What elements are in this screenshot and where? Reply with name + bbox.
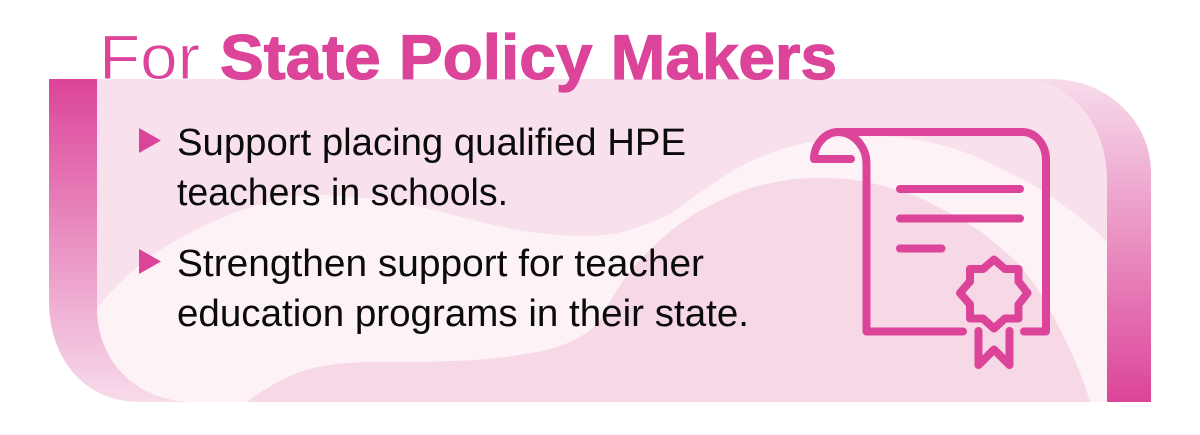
panel: background card	[49, 79, 1151, 402]
title: bold part: State Policy Makers	[220, 23, 837, 93]
bullet list	[139, 122, 749, 335]
bullet text 2: Strengthen support for teacher	[177, 243, 704, 285]
bullet arrow 2	[139, 249, 161, 274]
infographic	[49, 32, 1151, 402]
title	[99, 23, 837, 93]
badge	[960, 260, 1028, 328]
icon: certificate scroll with badge	[814, 132, 1046, 365]
title: light part: For	[99, 23, 200, 93]
bullet text 2: education programs in their state.	[177, 293, 749, 335]
light wave	[97, 136, 1107, 402]
panel face	[97, 79, 1107, 402]
bullet text 1: Support placing qualified HPE	[177, 122, 686, 164]
bullet text 1: teachers in schools.	[177, 172, 508, 214]
bullet arrow 1	[139, 128, 161, 153]
text lines	[900, 189, 1020, 248]
scroll outline	[838, 132, 1046, 332]
ribbon	[978, 331, 1010, 365]
scroll curl	[814, 132, 851, 159]
left gradient band	[49, 79, 300, 402]
right gradient band	[950, 79, 1151, 402]
bottom wave	[247, 178, 1090, 402]
